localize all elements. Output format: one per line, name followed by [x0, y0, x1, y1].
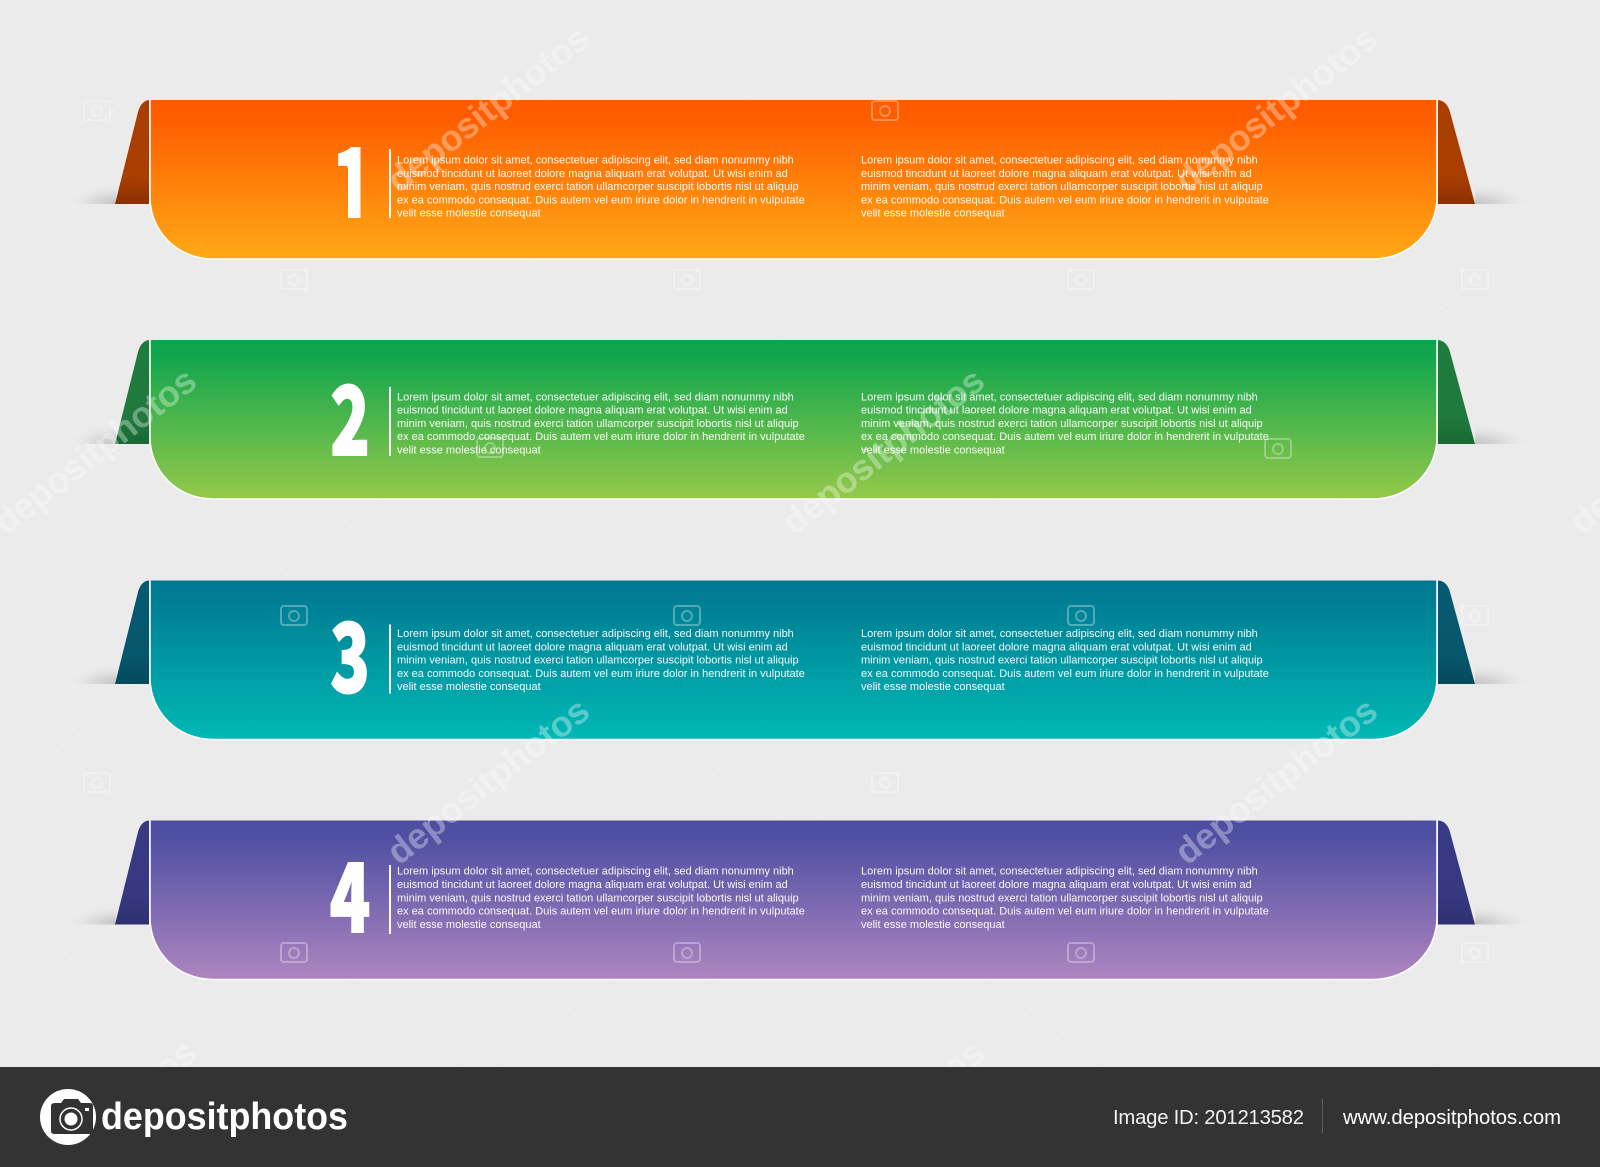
number 4: 4 [330, 822, 370, 960]
text column right [861, 866, 1269, 931]
shadows behind tabs [66, 664, 1533, 684]
footer separator [1322, 1099, 1323, 1133]
text column left: ex ea commodo consequat. Duis autem vel eum iriure dolor in hendrerit in vulputate [397, 906, 805, 918]
text column left: velit esse molestie consequat [397, 208, 541, 220]
banner outline [150, 100, 1437, 259]
text column right: minim veniam, quis nostrud exerci tation ullamcorper suscipit lobortis nisl ut aliquip [861, 418, 1263, 430]
text column left [397, 866, 805, 931]
text column right: velit esse molestie consequat [861, 208, 1005, 220]
panel: banner 1 [66, 100, 1533, 259]
banner body [150, 340, 1437, 499]
panel: banner 4 [66, 820, 1533, 980]
text column left: Lorem ipsum dolor sit amet, consectetuer adipiscing elit, sed diam nonummy nibh [397, 391, 794, 403]
banner outline [150, 340, 1437, 499]
text column left: minim veniam, quis nostrud exerci tation ullamcorper suscipit lobortis nisl ut aliquip [397, 181, 799, 193]
text column right: ex ea commodo consequat. Duis autem vel eum iriure dolor in hendrerit in vulputate [861, 906, 1269, 918]
text column right: Lorem ipsum dolor sit amet, consectetuer adipiscing elit, sed diam nonummy nibh [861, 866, 1258, 878]
text column right: velit esse molestie consequat [861, 444, 1005, 456]
text column right: Lorem ipsum dolor sit amet, consectetuer adipiscing elit, sed diam nonummy nibh [861, 154, 1258, 166]
text column right: Lorem ipsum dolor sit amet, consectetuer adipiscing elit, sed diam nonummy nibh [861, 391, 1258, 403]
text column left: ex ea commodo consequat. Duis autem vel eum iriure dolor in hendrerit in vulputate [397, 431, 805, 443]
number 3: 3 [330, 583, 370, 720]
text column right: euismod tincidunt ut laoreet dolore magna aliquam erat volutpat. Ut wisi enim ad [861, 879, 1252, 891]
left fold tab [115, 100, 149, 204]
text column left: velit esse molestie consequat [397, 444, 541, 456]
text column right: ex ea commodo consequat. Duis autem vel eum iriure dolor in hendrerit in vulputate [861, 431, 1269, 443]
text column right: euismod tincidunt ut laoreet dolore magna aliquam erat volutpat. Ut wisi enim ad [861, 405, 1252, 417]
text column left: Lorem ipsum dolor sit amet, consectetuer adipiscing elit, sed diam nonummy nibh [397, 866, 794, 878]
divider [389, 387, 391, 456]
left fold tab [115, 340, 149, 444]
banner body [150, 820, 1437, 980]
right fold tab [1438, 580, 1475, 684]
divider [389, 624, 391, 694]
banner outline [150, 580, 1437, 740]
footer bar [0, 1067, 1600, 1167]
text column left: ex ea commodo consequat. Duis autem vel eum iriure dolor in hendrerit in vulputate [397, 668, 805, 680]
text column left: euismod tincidunt ut laoreet dolore magna aliquam erat volutpat. Ut wisi enim ad [397, 879, 788, 891]
banner body [150, 580, 1437, 740]
left fold tab [115, 580, 149, 684]
text column left: ex ea commodo consequat. Duis autem vel eum iriure dolor in hendrerit in vulputate [397, 194, 805, 206]
text column left: minim veniam, quis nostrud exerci tation ullamcorper suscipit lobortis nisl ut aliquip [397, 655, 799, 667]
text column right: minim veniam, quis nostrud exerci tation ullamcorper suscipit lobortis nisl ut aliquip [861, 892, 1263, 904]
shadows behind tabs [66, 424, 1533, 444]
number 1: 1 [332, 107, 374, 245]
logo wordmark: depositphotos [101, 1096, 348, 1138]
watermark camera icons [84, 101, 1488, 962]
text column left: minim veniam, quis nostrud exerci tation ullamcorper suscipit lobortis nisl ut aliquip [397, 418, 799, 430]
text column right: ex ea commodo consequat. Duis autem vel eum iriure dolor in hendrerit in vulputate [861, 194, 1269, 206]
watermark overlay: depositphotos [379, 689, 597, 872]
banner outline [150, 820, 1437, 980]
watermark overlay: depositphotos [774, 359, 992, 542]
divider [389, 865, 391, 934]
text column left: Lorem ipsum dolor sit amet, consectetuer adipiscing elit, sed diam nonummy nibh [397, 628, 794, 640]
text column right: euismod tincidunt ut laoreet dolore magna aliquam erat volutpat. Ut wisi enim ad [861, 641, 1252, 653]
text column left: euismod tincidunt ut laoreet dolore magna aliquam erat volutpat. Ut wisi enim ad [397, 405, 788, 417]
text column left [397, 628, 805, 693]
shadows behind tabs [66, 184, 1533, 204]
text column left [397, 391, 805, 456]
text column left: euismod tincidunt ut laoreet dolore magna aliquam erat volutpat. Ut wisi enim ad [397, 641, 788, 653]
left fold tab [115, 820, 149, 924]
icon: camera logo [40, 1089, 96, 1145]
banner body [150, 100, 1437, 259]
divider [389, 149, 391, 218]
image id: Image ID: 201213582 [1113, 1107, 1304, 1129]
text column right: euismod tincidunt ut laoreet dolore magna aliquam erat volutpat. Ut wisi enim ad [861, 168, 1252, 180]
text column right [861, 154, 1269, 220]
text column right: ex ea commodo consequat. Duis autem vel eum iriure dolor in hendrerit in vulputate [861, 668, 1269, 680]
text column right [861, 391, 1269, 456]
text column left [397, 154, 805, 220]
text column left: velit esse molestie consequat [397, 681, 541, 693]
number 2: 2 [330, 346, 370, 483]
right fold tab [1438, 100, 1475, 204]
right fold tab [1438, 820, 1475, 924]
watermark overlay: depositphotos [1167, 689, 1385, 872]
shadows behind tabs [66, 904, 1533, 924]
text column right: minim veniam, quis nostrud exerci tation ullamcorper suscipit lobortis nisl ut aliquip [861, 655, 1263, 667]
watermark overlay: depositphotos [1167, 17, 1385, 200]
text column right: velit esse molestie consequat [861, 919, 1005, 931]
text column left: minim veniam, quis nostrud exerci tation ullamcorper suscipit lobortis nisl ut aliquip [397, 892, 799, 904]
panel: banner 2 [66, 340, 1533, 499]
text column left: euismod tincidunt ut laoreet dolore magna aliquam erat volutpat. Ut wisi enim ad [397, 168, 788, 180]
text column right: minim veniam, quis nostrud exerci tation ullamcorper suscipit lobortis nisl ut aliquip [861, 181, 1263, 193]
watermark overlay: depositphotos [379, 17, 597, 200]
panel: banner 3 [66, 580, 1533, 740]
right fold tab [1438, 340, 1475, 444]
text column left: Lorem ipsum dolor sit amet, consectetuer adipiscing elit, sed diam nonummy nibh [397, 154, 794, 166]
text column right: velit esse molestie consequat [861, 681, 1005, 693]
text column left: velit esse molestie consequat [397, 919, 541, 931]
text column right: Lorem ipsum dolor sit amet, consectetuer adipiscing elit, sed diam nonummy nibh [861, 628, 1258, 640]
text column right [861, 628, 1269, 693]
website url: www.depositphotos.com [1342, 1107, 1561, 1129]
